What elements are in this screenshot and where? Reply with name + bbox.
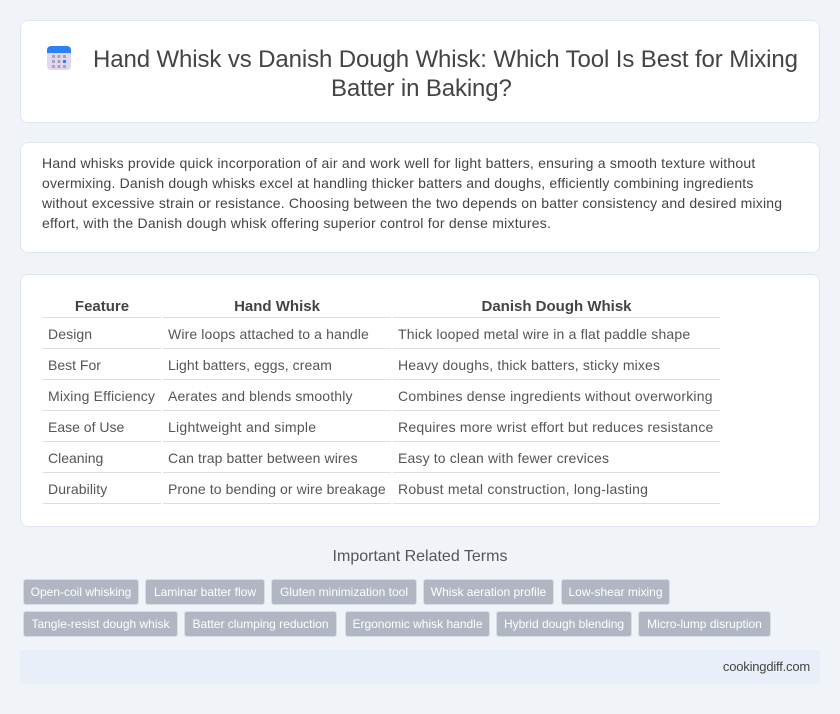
tags: related terms: Tangle-resist dough whisk <box>31 617 170 631</box>
description text: overmixing. Danish dough whisks excel at handling thicker batters and doughs, efficiently combining ingredients <box>42 175 754 191</box>
row: durability: Durability <box>48 481 107 497</box>
row: mixing efficiency: Combines dense ingredients without overworking <box>398 388 713 404</box>
tags: related terms: Hybrid dough blending <box>504 617 624 631</box>
table headers: Feature <box>75 298 129 315</box>
row: ease of use: Ease of Use <box>48 419 124 435</box>
row: cleaning <box>48 450 609 466</box>
panel: header <box>20 20 820 123</box>
row: durability: Prone to bending or wire breakage <box>168 481 386 497</box>
row: durability: Robust metal construction, long-lasting <box>398 481 648 497</box>
tags: related terms: Ergonomic whisk handle <box>352 617 483 631</box>
row: best for: Best For <box>48 357 101 373</box>
tags: related terms: Low-shear mixing <box>568 585 663 599</box>
description text: Hand whisks provide quick incorporation of air and work well for light batters, ensuring a smooth texture without <box>42 155 756 171</box>
row: mixing efficiency: Mixing Efficiency <box>48 388 155 404</box>
title: Hand Whisk vs Danish Dough Whisk: Which Tool Is Best for Mixing <box>93 46 798 73</box>
panel: description <box>20 142 820 253</box>
row: ease of use: Requires more wrist effort but reduces resistance <box>398 419 714 435</box>
title: Batter in Baking? <box>331 75 512 102</box>
table headers <box>75 298 632 315</box>
footer bar <box>20 650 820 684</box>
description text: effort, with the Danish dough whisk offering superior control for dense mixtures. <box>42 215 551 231</box>
row: design: Wire loops attached to a handle <box>168 326 369 342</box>
row: design <box>48 326 690 342</box>
row: best for <box>48 357 660 373</box>
tags: related terms: Open-coil whisking <box>31 585 131 599</box>
icon: calendar <box>47 46 71 70</box>
row: durability <box>48 481 648 497</box>
heading: related terms: Important Related Terms <box>333 548 507 565</box>
row: best for: Light batters, eggs, cream <box>168 357 332 373</box>
title <box>93 46 798 102</box>
table headers: Danish Dough Whisk <box>482 298 632 315</box>
row: mixing efficiency <box>48 388 713 404</box>
row: ease of use: Lightweight and simple <box>168 419 316 435</box>
footer source: cookingdiff.com <box>723 659 810 674</box>
row: best for: Heavy doughs, thick batters, sticky mixes <box>398 357 660 373</box>
tags: related terms <box>23 579 771 637</box>
row: design: Thick looped metal wire in a flat paddle shape <box>398 326 690 342</box>
row: cleaning: Easy to clean with fewer crevices <box>398 450 609 466</box>
row: cleaning: Cleaning <box>48 450 103 466</box>
tags: related terms: Micro-lump disruption <box>647 617 762 631</box>
table headers: Hand Whisk <box>234 298 320 315</box>
tags: related terms: Batter clumping reduction <box>192 617 329 631</box>
row: cleaning: Can trap batter between wires <box>168 450 358 466</box>
tags: related terms: Gluten minimization tool <box>280 585 408 599</box>
row: mixing efficiency: Aerates and blends smoothly <box>168 388 353 404</box>
tags: related terms: Laminar batter flow <box>154 585 256 599</box>
description text: without excessive strain or resistance. Choosing between the two depends on batter consistency and desired mixing <box>42 195 782 211</box>
row: design: Design <box>48 326 92 342</box>
row: ease of use <box>48 419 714 435</box>
panel: comparison table <box>20 274 820 527</box>
tags: related terms: Whisk aeration profile <box>431 585 546 599</box>
description text <box>42 155 782 231</box>
